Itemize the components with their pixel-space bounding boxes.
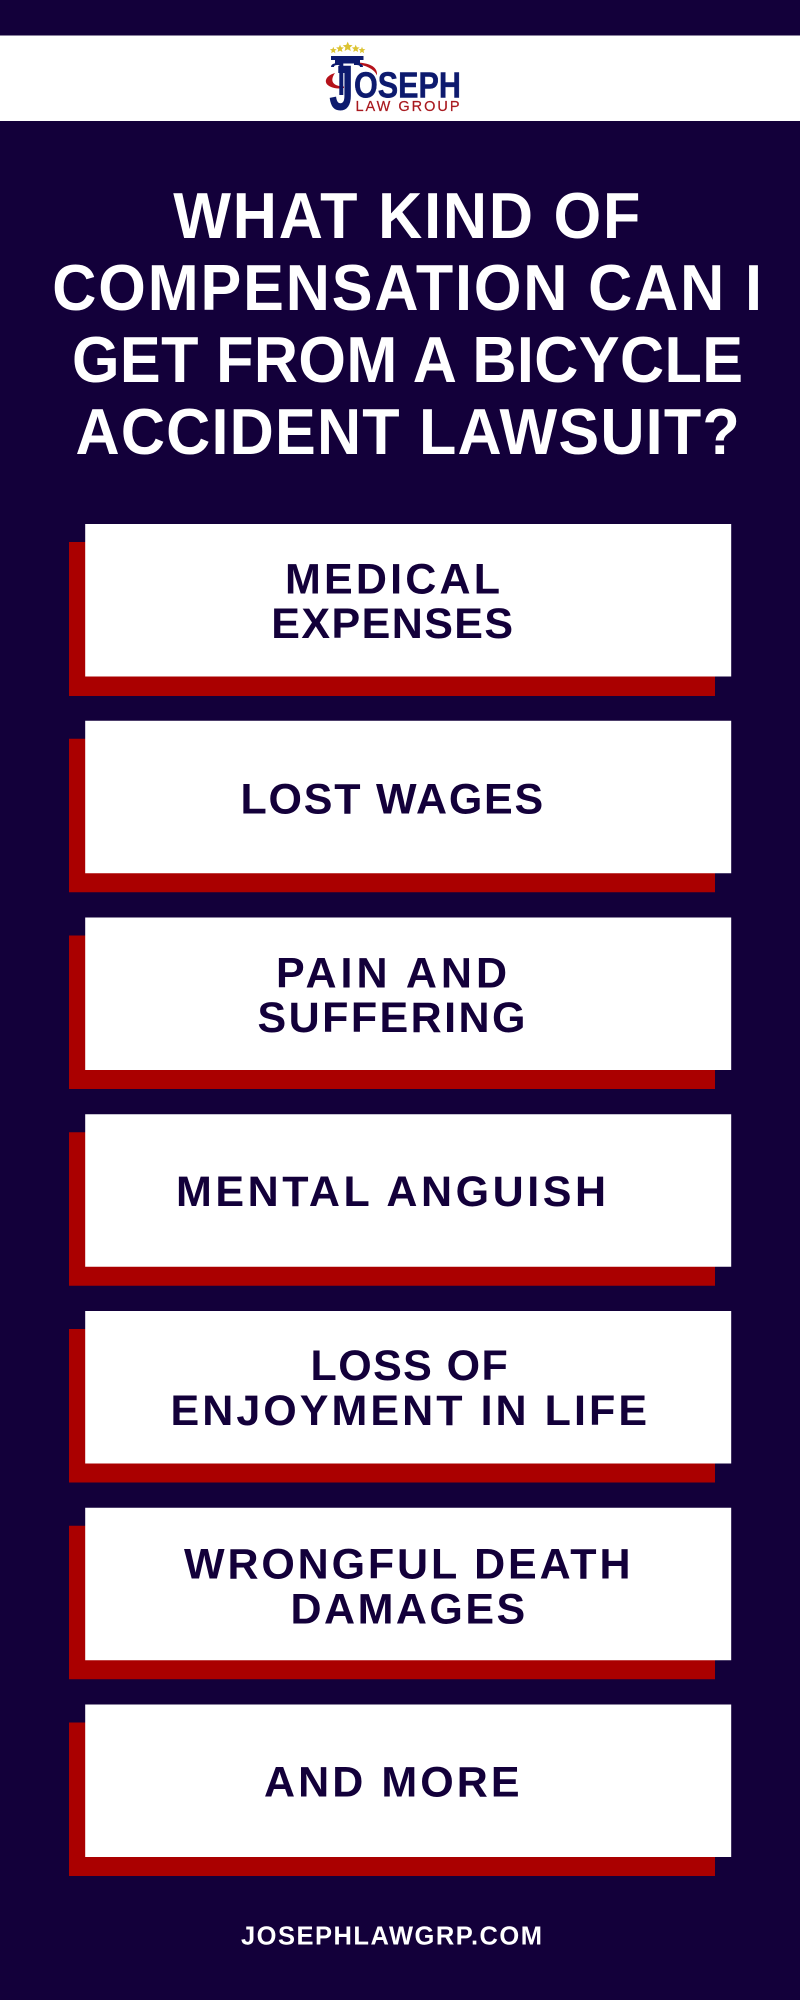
card: and more xyxy=(69,1704,731,1876)
title: WHAT KIND OF xyxy=(173,180,640,252)
header band with logo xyxy=(0,36,800,124)
logo wordmark J: J xyxy=(329,52,354,124)
card: wrongful death damages: WRONGFUL DEATH xyxy=(184,1541,630,1589)
title: ACCIDENT LAWSUIT? xyxy=(76,396,740,468)
title: COMPENSATION CAN I xyxy=(52,252,762,324)
logo stars xyxy=(330,42,365,53)
card: mental anguish xyxy=(69,1114,731,1286)
card: lost wages xyxy=(69,721,731,892)
footer url: JOSEPHLAWGRP.COM xyxy=(241,1922,542,1950)
card: pain and suffering: PAIN AND xyxy=(276,949,507,997)
card: medical expenses: MEDICAL xyxy=(285,555,500,603)
card: lost wages: LOST WAGES xyxy=(240,775,543,823)
title: GET FROM A BICYCLE xyxy=(72,324,743,396)
title xyxy=(52,180,762,468)
card: and more: AND MORE xyxy=(264,1758,520,1806)
card: pain and suffering xyxy=(69,918,731,1089)
card: wrongful death damages xyxy=(69,1508,731,1679)
logo swoosh xyxy=(326,62,377,88)
logo pillar xyxy=(331,56,364,95)
logo subtitle: LAW GROUP xyxy=(356,99,460,115)
card: mental anguish: MENTAL ANGUISH xyxy=(176,1168,606,1216)
logo wordmark: OSEPH xyxy=(354,64,461,105)
logo: Joseph Law Group xyxy=(326,42,461,124)
card: loss of enjoyment in life xyxy=(69,1311,731,1482)
card: loss of enjoyment in life: LOSS OF xyxy=(310,1342,508,1390)
card: pain and suffering: SUFFERING xyxy=(258,994,526,1042)
card: medical expenses: EXPENSES xyxy=(271,600,513,648)
card: loss of enjoyment in life: ENJOYMENT IN LIFE xyxy=(170,1387,647,1435)
card: medical expenses xyxy=(69,524,731,696)
card: wrongful death damages: DAMAGES xyxy=(290,1585,525,1633)
